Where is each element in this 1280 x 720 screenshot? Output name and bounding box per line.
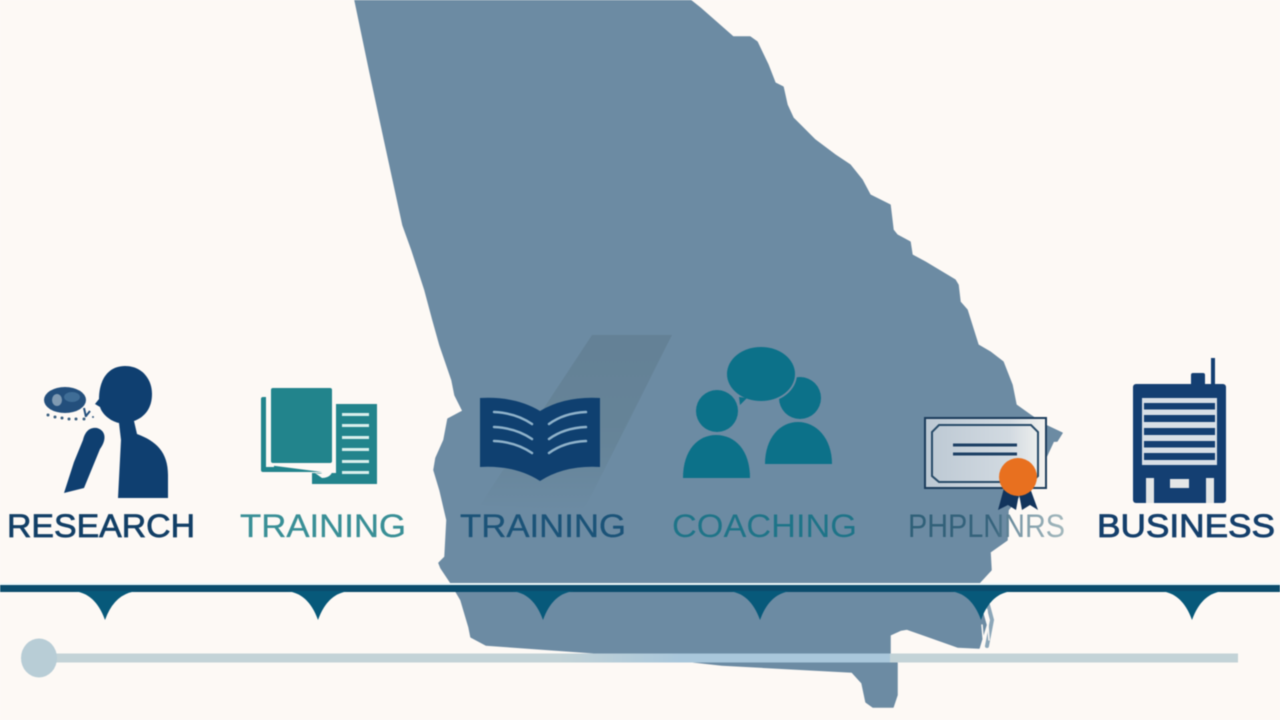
icon: open book [480, 398, 600, 481]
map coast strands [982, 605, 992, 648]
timeline rule with tick markers [0, 583, 1280, 620]
speech bubble [725, 345, 797, 405]
label: training 2: TRAINING [460, 508, 626, 544]
icon: researcher with globe [44, 366, 168, 498]
research dots [46, 414, 94, 420]
slider knob [21, 638, 57, 678]
progress slider [21, 638, 1238, 678]
label: coaching: COACHING [672, 508, 857, 544]
certificate frame [925, 418, 1046, 488]
slider track [50, 654, 1238, 662]
window stripes [1144, 403, 1215, 460]
roof box [1191, 373, 1205, 386]
seal [999, 458, 1037, 496]
side document [312, 404, 377, 484]
tick 4 [727, 591, 793, 620]
tick 1 [72, 591, 139, 620]
building body [1133, 384, 1226, 503]
tick 5 [948, 591, 1014, 620]
diagonal slash shadow on map [480, 335, 672, 512]
label: training: TRAINING [240, 508, 406, 544]
raised arm [64, 428, 105, 493]
person left [683, 390, 750, 478]
front book [268, 386, 334, 474]
label: partners: PHPLNNRS [908, 508, 1065, 544]
certificate lines [953, 445, 1017, 454]
icon: coaching people [683, 345, 832, 478]
icon: business building [1133, 358, 1226, 503]
window block [1142, 398, 1217, 465]
back page [261, 397, 331, 472]
tick 2 [285, 591, 351, 620]
book text lines [494, 412, 586, 453]
label: research: RESEARCH [7, 508, 195, 544]
icon: certificate [925, 418, 1046, 510]
map silhouette: Georgia [355, 0, 1062, 707]
globe [44, 387, 90, 417]
icon: training documents [261, 386, 377, 484]
slider highlight over map [560, 654, 890, 662]
document lines [342, 413, 369, 474]
tick 3 [510, 591, 576, 620]
researcher head and torso [95, 366, 168, 498]
ribbon [998, 488, 1038, 510]
page curl [315, 463, 334, 478]
label: business: BUSINESS [1097, 508, 1275, 544]
tick 6 [1159, 591, 1225, 620]
inner border [932, 425, 1038, 482]
building door panels [1146, 478, 1214, 503]
person right [765, 377, 832, 464]
antenna [1211, 358, 1215, 386]
